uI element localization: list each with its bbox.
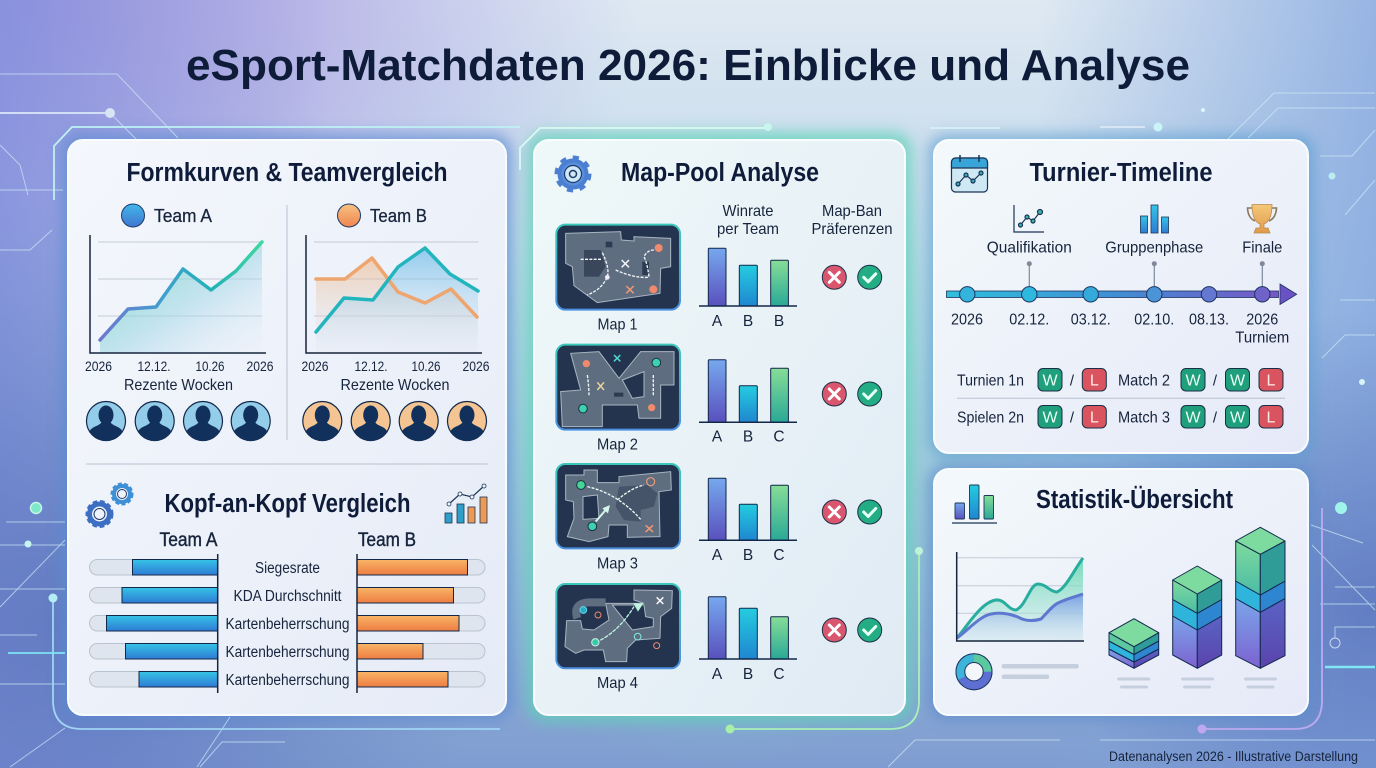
chart: head-to-head bars: Kartenbeherrschung bbox=[226, 672, 350, 689]
map image 3 bbox=[556, 464, 680, 548]
chart: 3D stacked bars bbox=[1109, 527, 1285, 668]
chart: head-to-head bars: Siegesrate bbox=[255, 560, 320, 577]
row: Map 2: B bbox=[743, 428, 753, 446]
timeline dates: 08.13. bbox=[1189, 312, 1229, 328]
panel: Statistik-Uebersicht bbox=[934, 469, 1308, 715]
row: Map 4: Map 4 bbox=[597, 675, 638, 692]
avatars: Team A bbox=[86, 402, 270, 441]
results row 2 bbox=[957, 406, 1283, 428]
row: Map 1: B bbox=[774, 313, 784, 330]
heading: Kopf-an-Kopf: Kopf-an-Kopf Vergleich bbox=[164, 490, 410, 518]
heading: Turnier-Timeline: Turnier-Timeline bbox=[1030, 159, 1212, 187]
bars 1 bbox=[699, 248, 797, 306]
bars 3 bbox=[699, 478, 797, 540]
results row 1 bbox=[957, 368, 1283, 391]
row: Map 2: C bbox=[773, 428, 785, 446]
column head: Winrate: Winrate bbox=[722, 203, 774, 220]
label: Team A: Team A bbox=[160, 530, 218, 551]
row: Map 3: B bbox=[743, 547, 753, 564]
row: Map 4: B bbox=[743, 666, 753, 683]
bars 2 bbox=[699, 360, 797, 422]
timeline dates: 03.12. bbox=[1071, 312, 1111, 328]
results row 1: Turnien 1n bbox=[957, 372, 1024, 390]
icon: chart with bars bbox=[445, 484, 487, 523]
ban icons 3 bbox=[822, 500, 882, 524]
legend: Team A: Team A bbox=[154, 206, 212, 226]
chart: head-to-head bars: Kartenbeherrschung bbox=[226, 616, 350, 633]
milestone labels bbox=[987, 240, 1282, 256]
chart: head-to-head bars: Kartenbeherrschung bbox=[226, 644, 350, 661]
chart: Team A form curve: 2026 bbox=[246, 358, 274, 374]
row: Map 4 bbox=[556, 584, 882, 692]
panel: Map-Pool Analyse bbox=[534, 140, 905, 715]
row: Map 3: C bbox=[773, 547, 785, 564]
timeline dates: 02.10. bbox=[1134, 312, 1174, 328]
timeline dates: 2026 bbox=[951, 312, 983, 328]
chart: Team B form curve: Rezente Wocken bbox=[340, 377, 450, 394]
row: Map 2: A bbox=[712, 428, 723, 446]
panel: Turnier-Timeline bbox=[934, 140, 1308, 453]
bars 4 bbox=[699, 597, 797, 659]
3D bar 2 bbox=[1173, 566, 1222, 668]
results row 2: Match 3 bbox=[1118, 410, 1170, 426]
results row 2: / bbox=[1213, 410, 1218, 426]
chart: Team B form curve: 12.12. bbox=[354, 358, 388, 374]
ban icons 1 bbox=[822, 265, 882, 289]
chart: Team A form curve: 12.12. bbox=[138, 358, 170, 374]
heading: Map-Pool: Map-Pool Analyse bbox=[621, 159, 819, 187]
row: Map 2: Map 2 bbox=[597, 436, 638, 454]
chart: Team B form curve: 2026 bbox=[302, 358, 329, 374]
title: eSport-Matchdaten 2026: Einblicke und Analyse bbox=[186, 41, 1190, 90]
timeline dates: 2026 bbox=[1246, 312, 1278, 328]
legend: Team B bbox=[338, 204, 427, 227]
icon: trophy bbox=[1248, 204, 1276, 233]
timeline dates bbox=[951, 312, 1289, 346]
chart: Team A form curve: 10.26 bbox=[196, 358, 225, 374]
ban icons 2 bbox=[822, 382, 882, 406]
row: Map 3 bbox=[556, 464, 882, 572]
column head: Map-Ban: Map-Ban bbox=[822, 203, 882, 220]
heading: Formkurven: Formkurven & Teamvergleich bbox=[126, 159, 448, 187]
chart: line and area bbox=[957, 552, 1084, 641]
results row 2: Spielen 2n bbox=[957, 410, 1024, 426]
chart: head-to-head bars: KDA Durchschnitt bbox=[234, 588, 342, 605]
row: Map 1: Map 1 bbox=[598, 316, 638, 334]
avatars: Team B bbox=[303, 402, 486, 441]
row: Map 1: B bbox=[743, 313, 753, 330]
row: Map 1 bbox=[556, 225, 882, 334]
milestone labels: Qualifikation bbox=[987, 240, 1072, 256]
timeline dates: Turniem bbox=[1235, 330, 1289, 346]
row: Map 2 bbox=[556, 345, 882, 454]
map image 4 bbox=[556, 584, 680, 668]
row: Map 3: Map 3 bbox=[597, 556, 638, 572]
icon: line chart bbox=[1014, 205, 1044, 232]
timeline dates: 02.12. bbox=[1009, 312, 1049, 328]
icon: gear bbox=[557, 158, 589, 190]
bar label placeholders bbox=[1117, 678, 1277, 688]
row: Map 3: A bbox=[712, 547, 723, 564]
heading: Statistik: Statistik-Übersicht bbox=[1036, 485, 1233, 514]
map image 2 bbox=[556, 345, 680, 430]
results row 1: Match 2 bbox=[1118, 372, 1170, 390]
label: Team B: Team B bbox=[358, 530, 416, 551]
icon: gears bbox=[88, 485, 131, 525]
3D bar 1 bbox=[1109, 619, 1159, 668]
column head: Praeferenzen: Präferenzen bbox=[812, 221, 892, 238]
results row 2: / bbox=[1070, 410, 1075, 426]
results row 1: / bbox=[1070, 372, 1075, 390]
row: Map 4: A bbox=[712, 666, 723, 683]
chart: Team A form curve bbox=[85, 235, 274, 394]
legend placeholders bbox=[1002, 664, 1079, 679]
ban icons 4 bbox=[822, 618, 882, 642]
column head: per Team: per Team bbox=[717, 221, 779, 238]
chart: Team A form curve: 2026 bbox=[85, 358, 112, 374]
icon: bars bbox=[1140, 205, 1168, 233]
legend: Team A bbox=[122, 204, 212, 227]
chart: Team A form curve: Rezente Wocken bbox=[124, 377, 233, 394]
timeline arrow bbox=[946, 261, 1297, 304]
milestone labels: Gruppenphase bbox=[1105, 240, 1203, 256]
icon: calendar bbox=[952, 155, 988, 192]
row: Map 1: A bbox=[712, 313, 723, 330]
chart: Team B form curve: 10.26 bbox=[412, 358, 441, 374]
milestone labels: Finale bbox=[1242, 240, 1282, 256]
chart: Team B form curve: 2026 bbox=[462, 358, 490, 374]
chart: donut bbox=[956, 654, 992, 690]
chart: Team B form curve bbox=[302, 235, 490, 394]
3D bar 3 bbox=[1236, 527, 1285, 668]
results row 1: / bbox=[1213, 372, 1218, 390]
map image 1 bbox=[556, 225, 680, 310]
footer note: Datenanalysen 2026 - Illustrative Darstellung bbox=[1109, 749, 1358, 764]
legend: Team B: Team B bbox=[370, 206, 427, 226]
icon: bars bbox=[952, 485, 997, 523]
chart: head-to-head bars bbox=[90, 554, 485, 693]
row: Map 4: C bbox=[773, 666, 785, 683]
panel: Formkurven und Kopf-an-Kopf bbox=[68, 140, 506, 715]
